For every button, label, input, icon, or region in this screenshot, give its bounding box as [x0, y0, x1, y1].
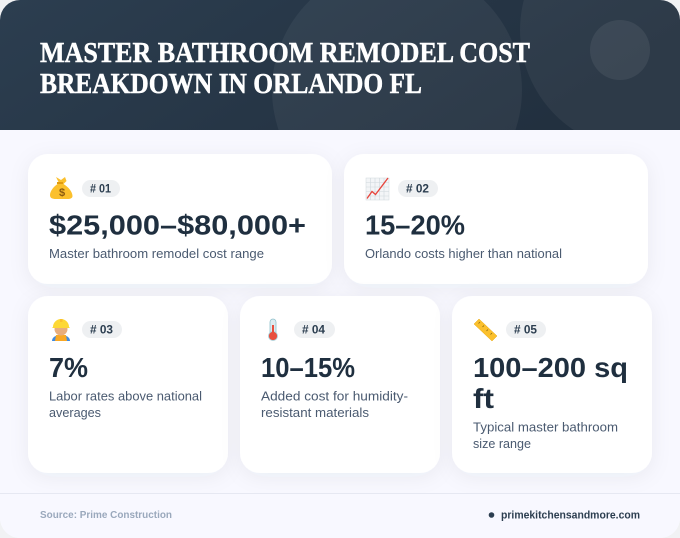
value: [473, 352, 628, 414]
source: Source: Prime Construction: [40, 509, 172, 521]
value: $25,000–$80,000+: [49, 210, 306, 240]
value: 7%: [49, 352, 88, 383]
icon: construction worker: [52, 319, 70, 341]
card 2: Orlando premium: [344, 154, 648, 284]
card 1: cost range: [28, 154, 332, 284]
value: 10–15%: [261, 352, 355, 383]
card 5: typical size: [452, 296, 652, 473]
footer: [0, 494, 680, 538]
label: [473, 420, 618, 451]
badge 05: [506, 321, 546, 338]
label: size range: [473, 436, 531, 451]
badge 01: # 01: [90, 184, 112, 196]
header banner: [0, 0, 680, 130]
badge 01: [82, 180, 120, 197]
value: 100–200 sq: [473, 352, 628, 383]
badge 02: [398, 180, 438, 197]
label: [49, 388, 202, 420]
icon: money bag: [50, 177, 72, 199]
title: MASTER BATHROOM REMODEL COST: [40, 38, 530, 69]
icon: chart increasing: [366, 178, 389, 200]
title: [40, 38, 530, 100]
card 4: humidity-resistant materials: [240, 296, 440, 473]
badge 04: # 04: [302, 324, 326, 336]
badge 03: # 03: [90, 324, 113, 336]
icon: ruler: [474, 319, 497, 341]
label: averages: [49, 405, 101, 420]
title: BREAKDOWN IN ORLANDO FL: [40, 69, 422, 100]
label: Added cost for humidity-: [261, 388, 408, 404]
label: [261, 388, 408, 420]
label: Typical master bathroom: [473, 420, 618, 434]
label: resistant materials: [261, 405, 370, 420]
label: Master bathroom remodel cost range: [49, 246, 264, 261]
value: ft: [473, 383, 494, 414]
label: Labor rates above national: [49, 388, 202, 404]
badge 02: # 02: [406, 184, 429, 196]
card 3: labor rates: [28, 296, 228, 473]
website: primekitchensandmore.com: [501, 510, 640, 522]
icon: thermometer: [268, 319, 278, 340]
badge 04: [294, 321, 335, 338]
badge 03: [82, 321, 122, 338]
badge 05: # 05: [514, 324, 538, 336]
icon: money bag: $: [59, 187, 65, 199]
value: 15–20%: [365, 210, 465, 240]
label: Orlando costs higher than national: [365, 246, 562, 261]
